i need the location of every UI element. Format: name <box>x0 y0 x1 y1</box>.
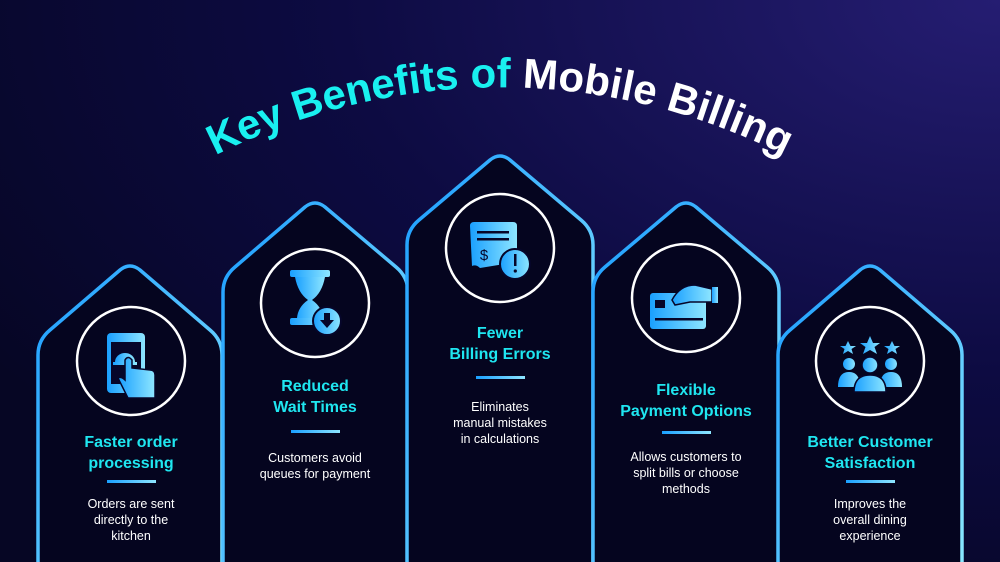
text block: Orders are sent <box>88 497 174 511</box>
heading: Satisfaction <box>825 455 915 472</box>
heading: Reduced <box>281 378 349 395</box>
text block: manual mistakes <box>453 416 547 430</box>
icon: receipt alert: $ <box>480 247 489 264</box>
title: Key Benefits of Mobile Billing <box>205 57 792 160</box>
icon: customers with stars <box>816 307 924 415</box>
heading: Flexible <box>656 382 716 399</box>
panel: fewer billing errors <box>407 156 593 562</box>
heading: Faster order <box>84 434 178 451</box>
text block: Eliminates <box>471 400 529 414</box>
text block: Allows customers to <box>630 450 742 464</box>
heading: Wait Times <box>273 399 357 416</box>
heading: processing <box>88 455 174 472</box>
panel: reduced wait times <box>223 203 408 562</box>
text block: queues for payment <box>260 467 371 481</box>
icon: tablet tap <box>77 307 185 415</box>
text block: Customers avoid <box>268 451 362 465</box>
text block: in calculations <box>461 432 539 446</box>
text block: kitchen <box>111 529 151 543</box>
heading: Better Customer <box>807 434 933 451</box>
icon: card in hand <box>632 244 740 352</box>
text block: experience <box>839 529 901 543</box>
panel: faster order processing <box>38 266 222 562</box>
panel: better customer satisfaction <box>778 266 962 562</box>
icon: hourglass <box>261 249 369 357</box>
heading: Payment Options <box>620 403 752 420</box>
heading: Fewer <box>477 325 523 342</box>
panel: flexible payment options <box>593 203 779 562</box>
text block: overall dining <box>833 513 907 527</box>
text block: split bills or choose <box>633 466 739 480</box>
text block: directly to the <box>94 513 168 527</box>
text block: methods <box>662 482 710 496</box>
icon: receipt alert <box>446 194 554 302</box>
heading: Billing Errors <box>449 346 551 363</box>
text block: Improves the <box>834 497 906 511</box>
